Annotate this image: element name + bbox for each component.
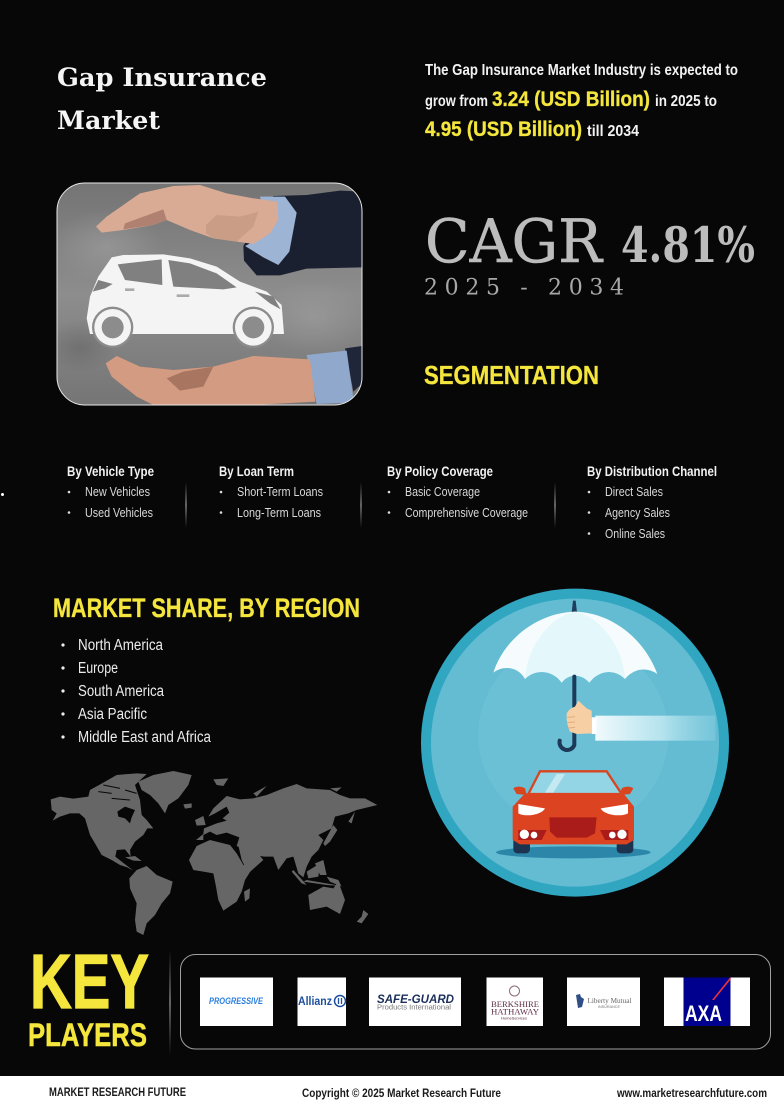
segment: by loan term: Short-Term Loans: [237, 485, 323, 499]
jacket bottom: [345, 346, 362, 392]
segment: by loan term: [219, 463, 323, 520]
market forecast text: till 2034: [587, 123, 639, 140]
logo: AXA: [664, 978, 750, 1026]
segment: by distribution channel: Agency Sales: [605, 506, 670, 520]
segment: by vehicle type: By Vehicle Type: [67, 463, 154, 479]
logo: Safe-Guard: [369, 978, 461, 1026]
panel: key player logos: [180, 954, 770, 1049]
car body: [87, 254, 284, 334]
logo: Liberty Mutual: [567, 978, 640, 1026]
logo: Berkshire Hathaway: HomeServices: [501, 1016, 527, 1020]
upper hand: [96, 185, 278, 244]
logo: Safe-Guard: Products International: [377, 1004, 451, 1012]
car windows: [93, 259, 281, 309]
CAGR figure: [424, 207, 755, 300]
footer: Copyright © 2025 Market Research Future: [302, 1086, 501, 1100]
shirt cuff bottom: [307, 351, 354, 404]
market forecast text: grow from: [425, 93, 488, 110]
segment: by policy coverage: Basic Coverage: [405, 485, 480, 499]
logo: Liberty Mutual: Liberty Mutual: [588, 997, 632, 1005]
segment: by loan term: By Loan Term: [219, 463, 294, 479]
segment: by distribution channel: Direct Sales: [605, 485, 663, 499]
CAGR figure: 2025 - 2034: [424, 276, 624, 300]
segment: by policy coverage: Comprehensive Coverage: [405, 506, 528, 520]
title: Gap Insurance: [57, 63, 267, 93]
logo: Safe-Guard: SAFE-GUARD: [377, 992, 454, 1006]
heading: key players: KEY: [30, 939, 149, 1025]
segment: by vehicle type: Used Vehicles: [85, 506, 153, 520]
logo: Berkshire Hathaway: BERKSHIRE: [491, 1000, 539, 1009]
umbrella: [493, 601, 657, 750]
heading: segmentation: SEGMENTATION: [424, 360, 599, 390]
red car: [496, 771, 651, 858]
stray dot: [1, 493, 4, 496]
segment: by policy coverage: By Policy Coverage: [387, 463, 493, 479]
jacket top: [243, 191, 362, 275]
logo: Progressive: [200, 978, 273, 1026]
segment: by distribution channel: Online Sales: [605, 527, 665, 541]
shirt cuff top: [245, 197, 297, 265]
logo: Allianz: [298, 978, 346, 1026]
logo: Berkshire Hathaway: HATHAWAY: [491, 1008, 539, 1016]
footer: MARKET RESEARCH FUTURE: [49, 1085, 186, 1099]
segment: by distribution channel: By Distribution Channel: [587, 463, 717, 479]
footer: [0, 1076, 784, 1108]
region list: Europe: [78, 660, 118, 677]
segment: by vehicle type: New Vehicles: [85, 485, 150, 499]
image: hands protecting car: [43, 183, 370, 405]
segment: by distribution channel: [587, 463, 717, 541]
market forecast text: [425, 62, 738, 141]
logo: Allianz: Allianz: [298, 996, 332, 1008]
segment: by policy coverage: [387, 463, 528, 520]
heading: market share by region: MARKET SHARE, BY REGION: [53, 593, 360, 623]
logo: Berkshire Hathaway: [486, 978, 543, 1026]
title: Market: [57, 106, 160, 136]
world map: [51, 771, 377, 935]
heading: key players: [28, 939, 149, 1053]
heading: key players: PLAYERS: [28, 1017, 147, 1053]
region list: North America: [78, 637, 163, 654]
segment: by vehicle type: [67, 463, 154, 520]
illustration: umbrella over car: [421, 589, 729, 897]
title: [57, 63, 267, 136]
market forecast text: 3.24 (USD Billion): [492, 88, 650, 111]
CAGR figure: 4.81%: [621, 216, 755, 274]
market forecast text: The Gap Insurance Market Industry is expected to: [425, 62, 738, 79]
logo: Liberty Mutual: INSURANCE: [598, 1005, 621, 1009]
region list: Middle East and Africa: [78, 729, 211, 746]
CAGR figure: CAGR: [425, 207, 604, 277]
region list: South America: [78, 683, 164, 700]
segment: by loan term: Long-Term Loans: [237, 506, 321, 520]
market forecast text: in 2025 to: [655, 93, 717, 110]
market forecast text: 4.95 (USD Billion): [425, 118, 582, 141]
region list: [61, 637, 211, 746]
logo: Progressive: PROGRESSIVE: [209, 996, 264, 1006]
logo: AXA: AXA: [685, 1001, 722, 1026]
region list: Asia Pacific: [78, 706, 147, 723]
hand and sleeve: [567, 701, 715, 741]
lower hand: [106, 356, 315, 405]
